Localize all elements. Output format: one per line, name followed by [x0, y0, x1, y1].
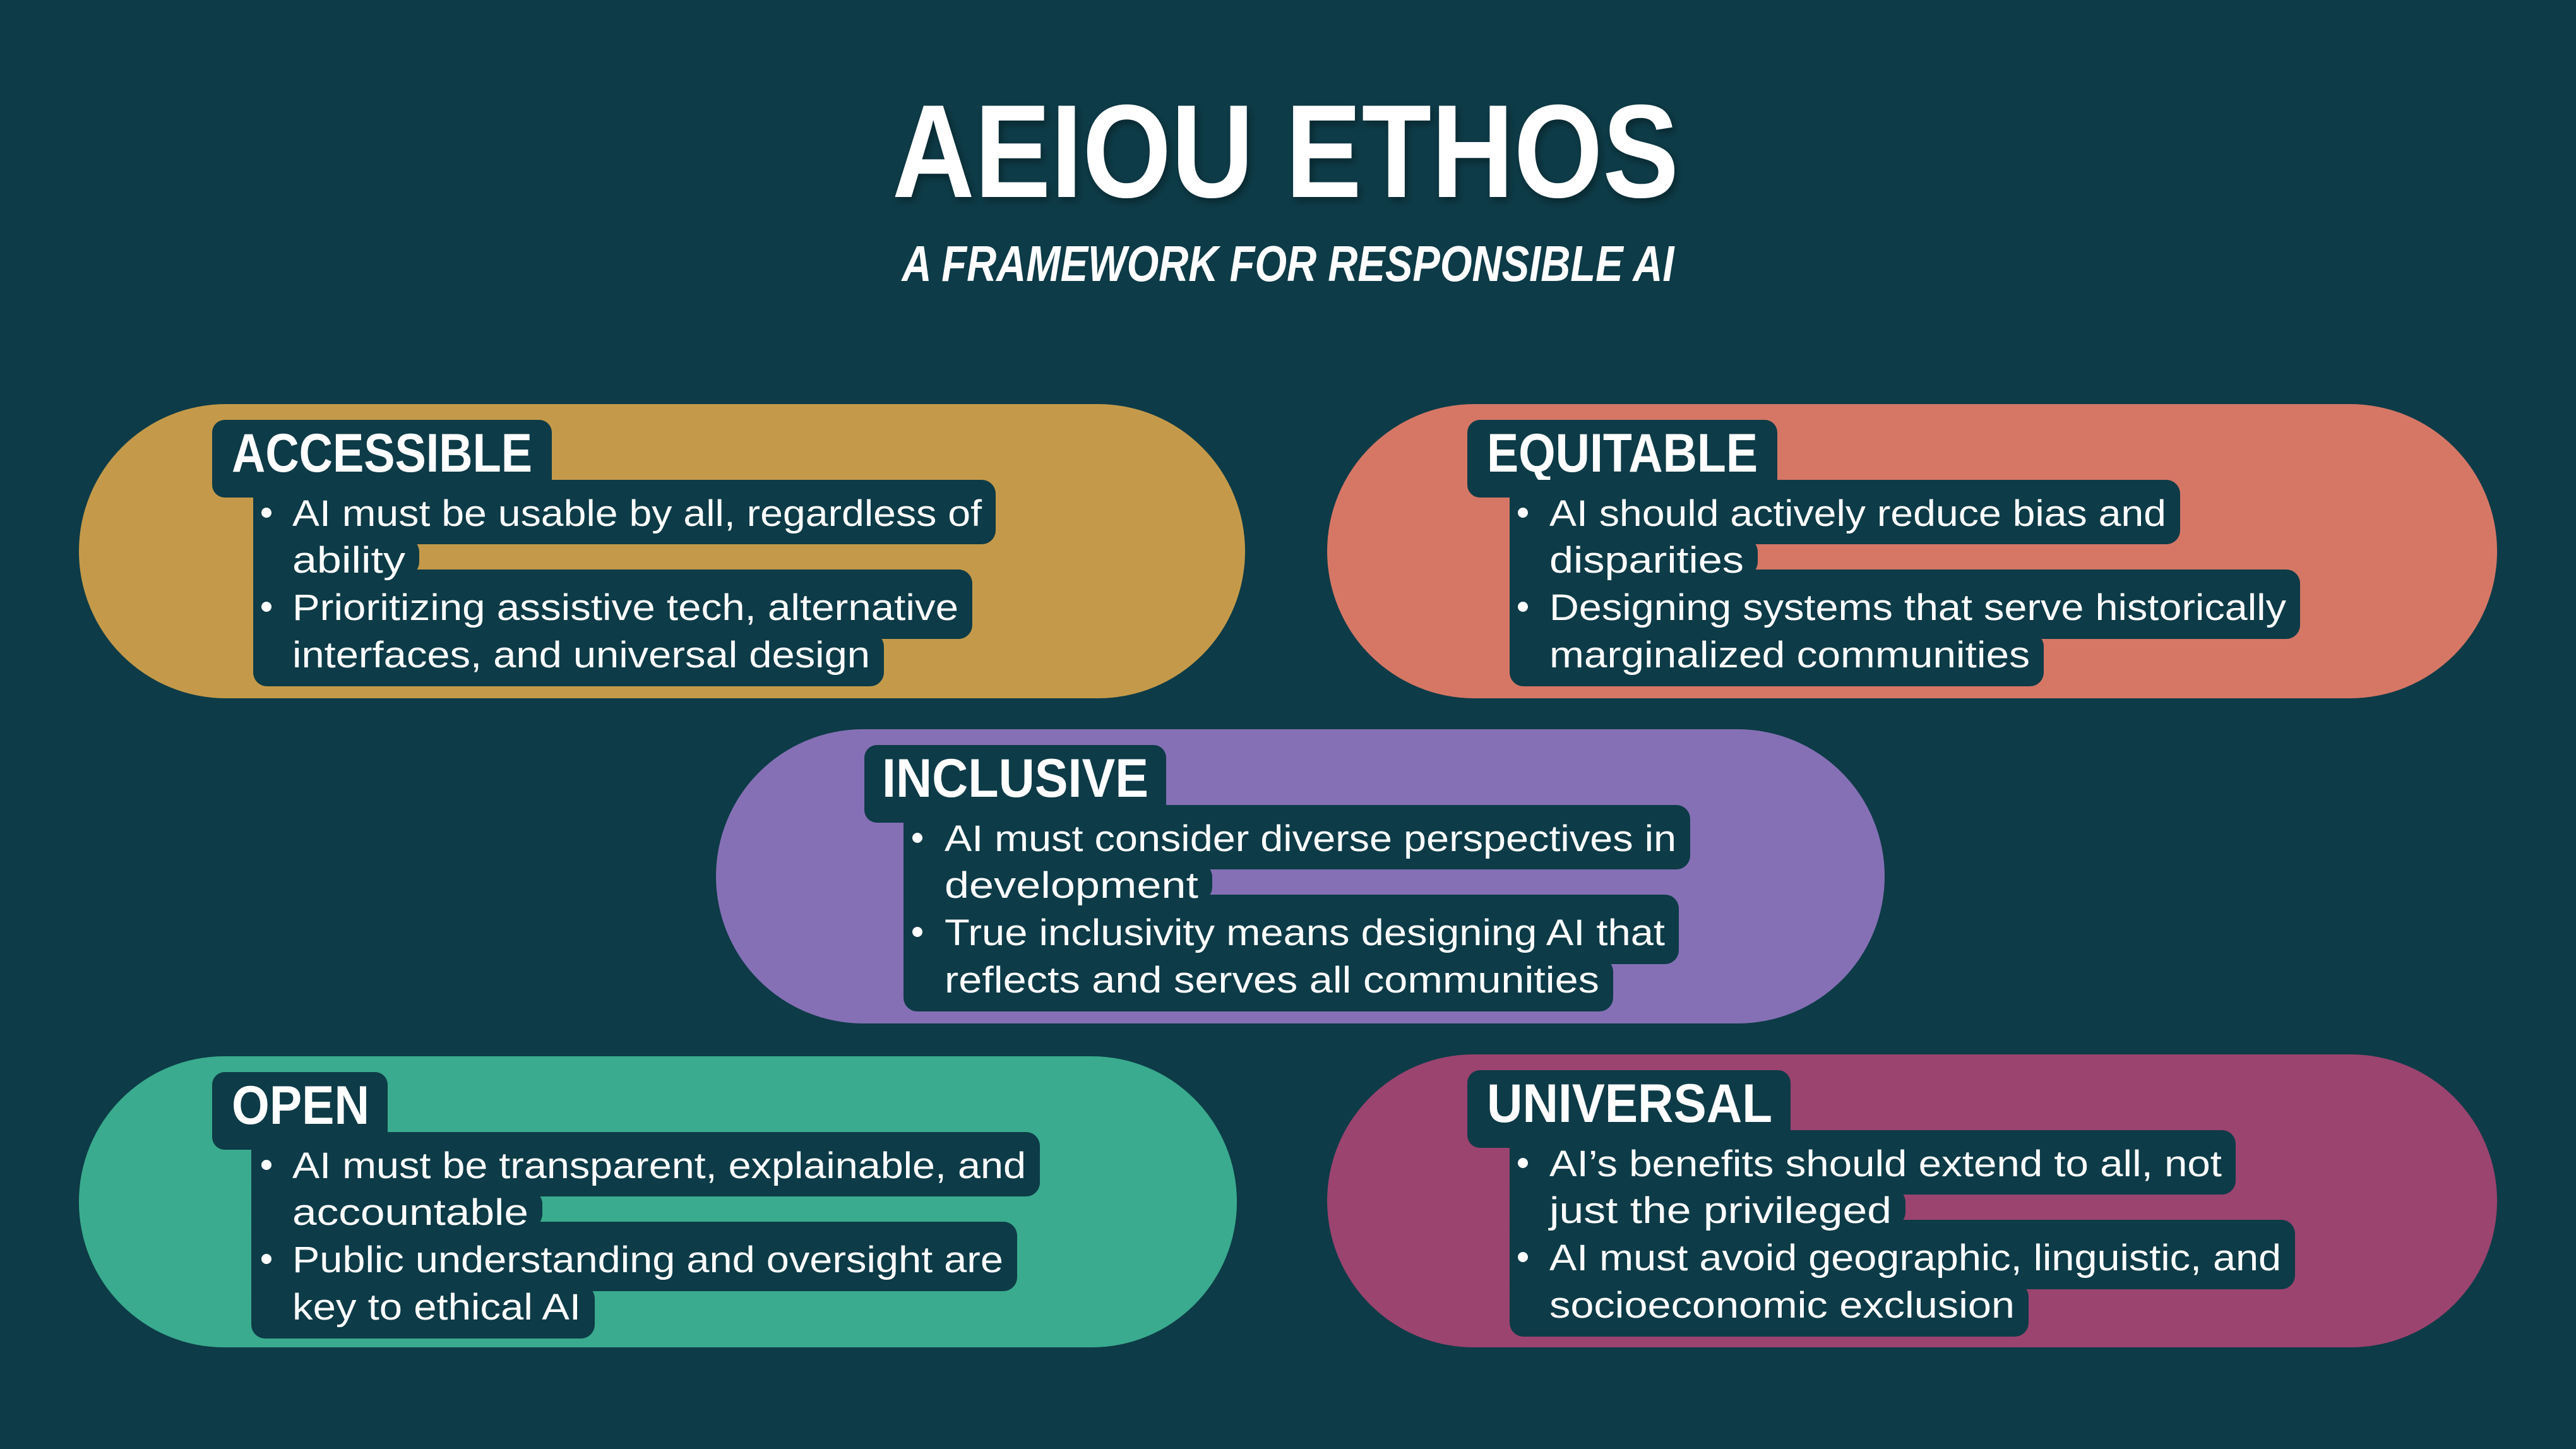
heading: equitable: [1467, 420, 1777, 498]
bullets: equitable: AI should actively reduce bias and: [1549, 493, 2166, 534]
panel: inclusive: [716, 729, 1885, 1023]
bullets: inclusive: AI must consider diverse perspectives in: [945, 818, 1676, 859]
bullets: open: Public understanding and oversight are: [292, 1239, 1003, 1280]
bullets: accessible: Prioritizing assistive tech, alternative: [292, 587, 958, 628]
bullets: equitable: marginalized communities: [1549, 635, 2030, 676]
bullets: equitable: disparities: [1549, 540, 1744, 581]
heading: accessible: ACCESSIBLE: [232, 423, 532, 484]
bullets: universal: just the privileged: [1548, 1190, 1892, 1231]
bullets: inclusive: reflects and serves all communities: [945, 960, 1599, 1001]
bullets: accessible: interfaces, and universal design: [292, 635, 870, 676]
bullets: inclusive: True inclusivity means designing AI that: [945, 912, 1665, 953]
bullets: open: [251, 1132, 1040, 1339]
title: AEIOU ETHOS: [892, 77, 1679, 225]
bullets: accessible: ability: [292, 540, 405, 581]
heading: accessible: [212, 420, 552, 498]
heading: inclusive: INCLUSIVE: [882, 748, 1148, 809]
bullets: open: accountable: [292, 1192, 528, 1233]
heading: universal: UNIVERSAL: [1487, 1073, 1772, 1134]
heading: open: OPEN: [232, 1075, 369, 1136]
bullets: universal: socioeconomic exclusion: [1549, 1285, 2015, 1326]
bullets: universal: [1510, 1130, 2295, 1337]
panel: universal: [1327, 1054, 2497, 1347]
panel: equitable: [1327, 404, 2497, 698]
bullets: equitable: Designing systems that serve historically: [1549, 587, 2286, 628]
bullets: universal: AI must avoid geographic, linguistic, and: [1549, 1237, 2281, 1279]
panel: accessible: [79, 404, 1245, 698]
heading: open: [212, 1072, 388, 1150]
bullets: inclusive: development: [945, 865, 1198, 906]
bullets: accessible: [253, 480, 996, 686]
bullets: open: AI must be transparent, explainable, and: [292, 1145, 1026, 1186]
bullets: equitable: [1510, 480, 2300, 686]
bullets: open: key to ethical AI: [292, 1287, 581, 1328]
subtitle: A FRAMEWORK FOR RESPONSIBLE AI: [901, 236, 1675, 292]
panel: open: [79, 1056, 1237, 1347]
bullets: accessible: AI must be usable by all, regardless of: [292, 493, 982, 534]
heading: equitable: EQUITABLE: [1487, 423, 1758, 484]
bullets: universal: AI’s benefits should extend to all, not: [1549, 1143, 2222, 1184]
bullets: inclusive: [903, 805, 1690, 1011]
